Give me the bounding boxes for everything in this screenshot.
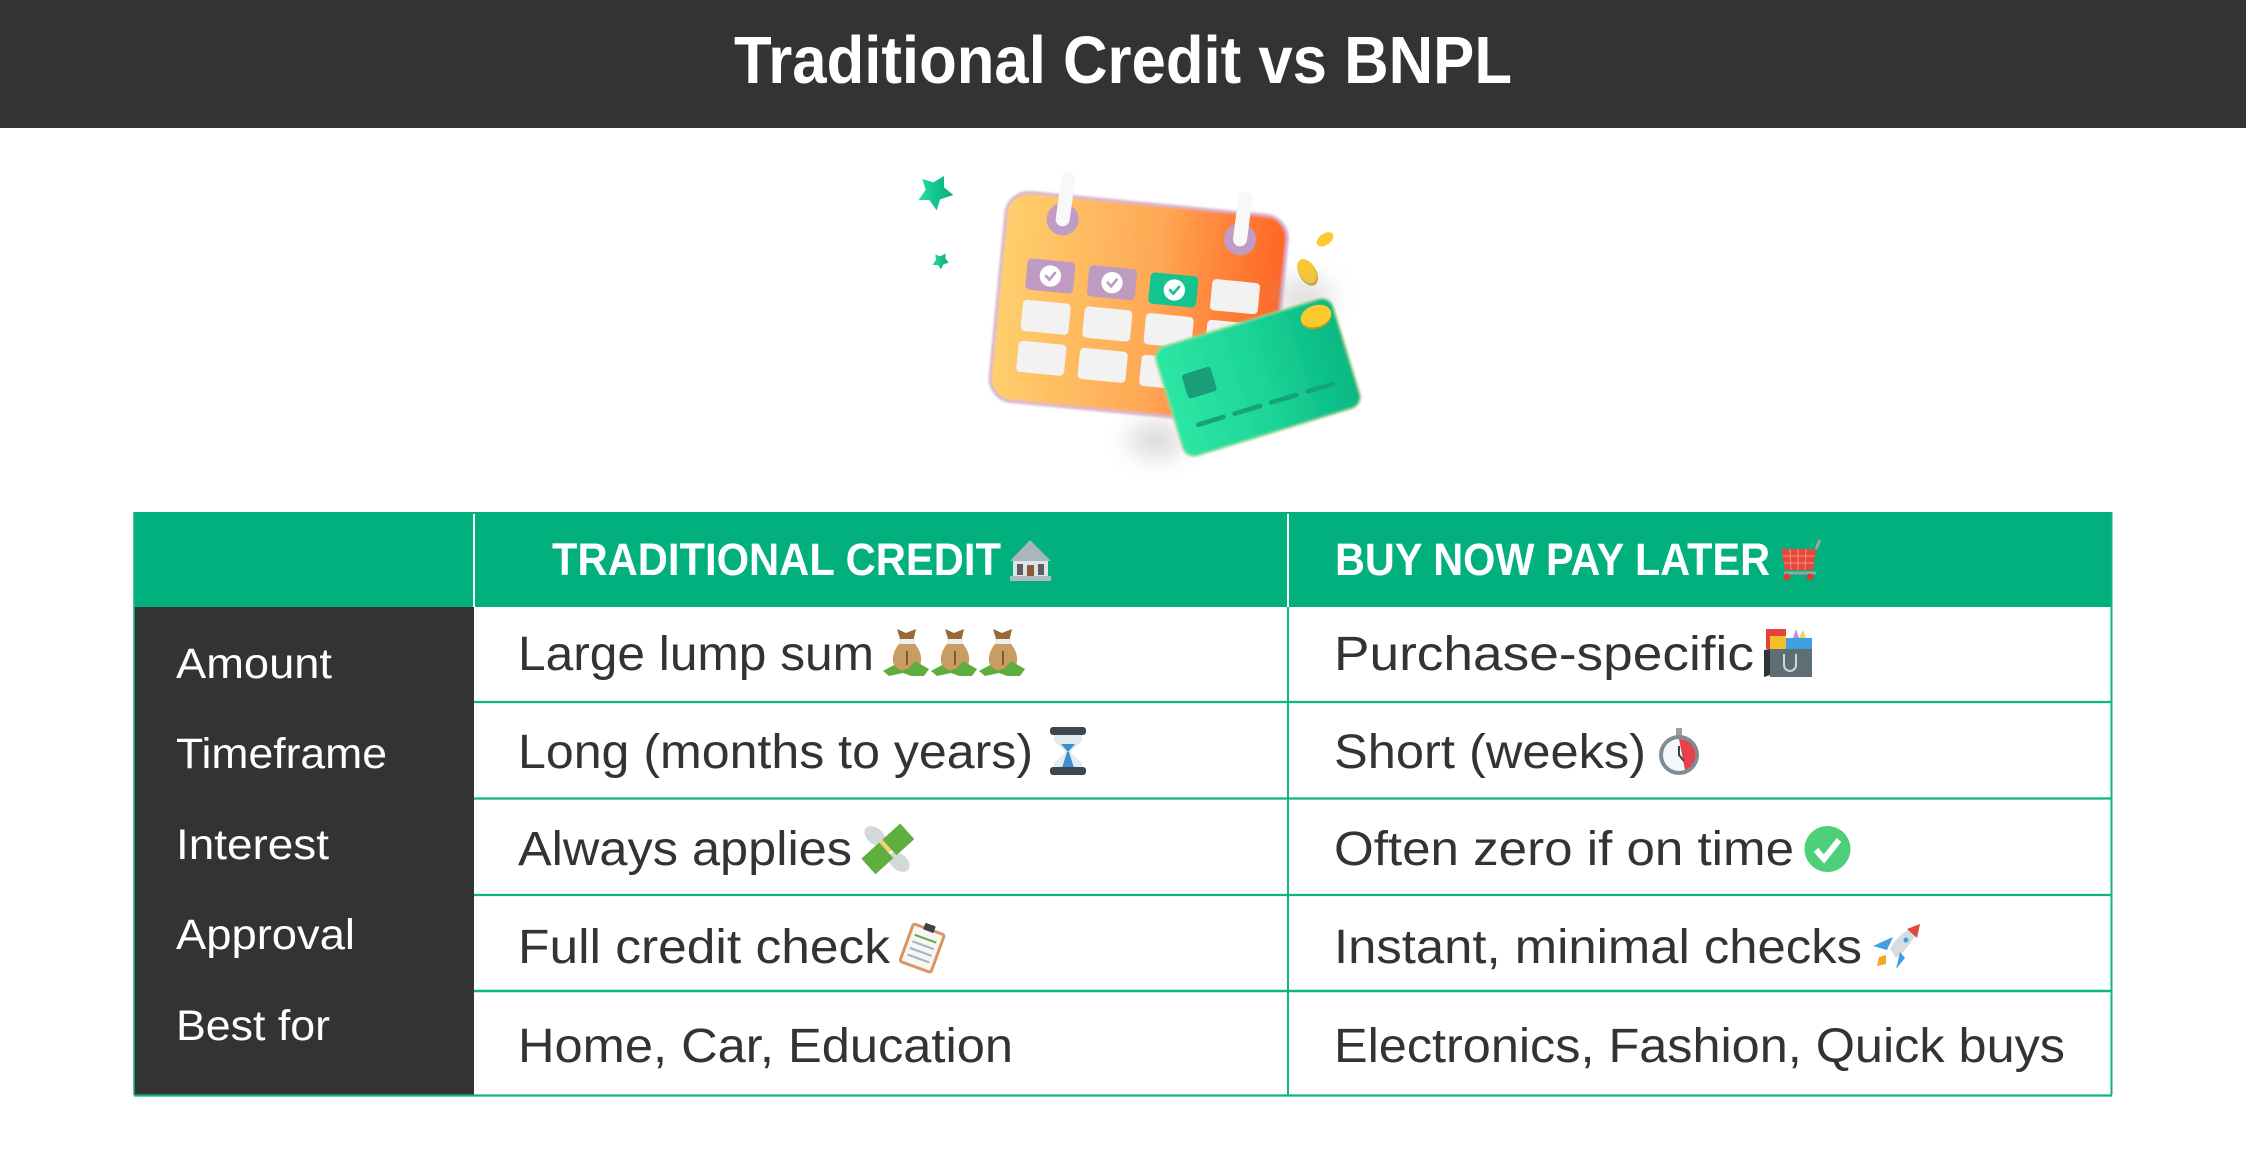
cell: electronics fashion quick buys: Electronics, Fashion, Quick buys (1334, 1019, 2065, 1073)
header: traditional credit: TRADITIONAL CREDIT (552, 534, 1001, 585)
row: best for (518, 1019, 2065, 1073)
calendar (988, 179, 1289, 455)
cell: purchase-specific: Purchase-specific (1334, 627, 1754, 681)
label: best for: Best for (176, 1003, 330, 1050)
label: timeframe: Timeframe (176, 731, 387, 778)
icon: bank (1010, 540, 1051, 581)
header: buy now pay later: BUY NOW PAY LATER (1335, 534, 1770, 585)
comparison table (134, 512, 2112, 1096)
cell: always applies: Always applies (518, 822, 852, 876)
coins (1293, 229, 1336, 289)
label: amount: Amount (176, 641, 332, 688)
cell: large lump sum: Large lump sum (518, 627, 874, 681)
label: interest: Interest (176, 822, 329, 869)
illustration: calendar with credit card (919, 176, 1363, 459)
icon: small star (932, 253, 949, 269)
icon: check mark (1804, 826, 1850, 872)
icon: shopping cart (1781, 540, 1820, 580)
title bar (0, 0, 2246, 128)
cell: full credit check: Full credit check (518, 920, 891, 974)
row: timeframe (518, 725, 1699, 779)
row: amount (518, 627, 1812, 681)
cell: often zero if on time: Often zero if on time (1334, 822, 1794, 876)
table header band (134, 512, 2112, 607)
icon: large star (919, 176, 953, 210)
title: Traditional Credit vs BNPL (734, 23, 1512, 98)
icon: hourglass (1050, 727, 1086, 775)
icon: stopwatch (1659, 728, 1699, 775)
icon: money bags (883, 629, 1025, 676)
cell: instant minimal checks: Instant, minimal checks (1334, 920, 1862, 974)
left label column (134, 607, 474, 1095)
cell: long months to years: Long (months to years) (518, 725, 1033, 779)
table grid lines (134, 512, 2112, 1096)
icon: clipboard (900, 919, 946, 973)
credit card (1153, 280, 1363, 459)
row: approval (518, 919, 1920, 974)
cell: home car education: Home, Car, Education (518, 1019, 1013, 1073)
icon: rocket (1873, 924, 1920, 969)
icon: money with wings (861, 822, 914, 876)
row: interest (518, 822, 1850, 876)
label: approval: Approval (176, 912, 355, 959)
icon: shopping bag (1764, 629, 1812, 677)
cell: short weeks: Short (weeks) (1334, 725, 1646, 779)
